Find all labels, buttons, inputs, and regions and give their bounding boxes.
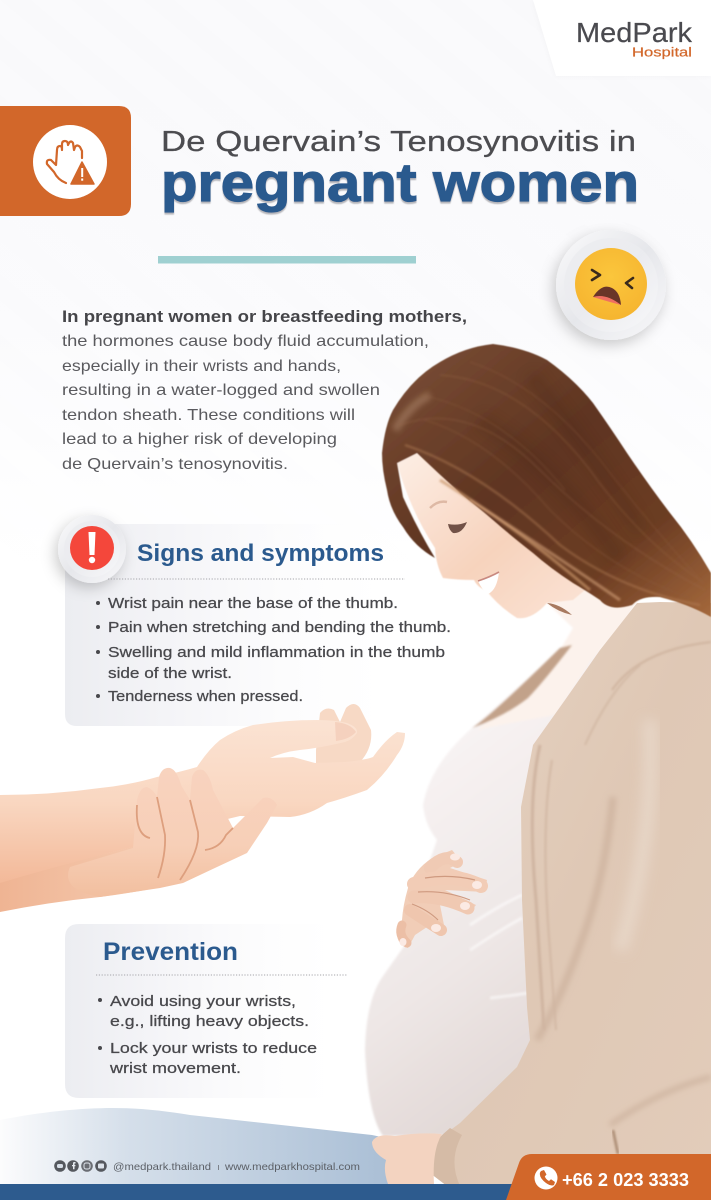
icon: warning triangle — [71, 162, 94, 184]
panel: prevention background — [65, 924, 390, 1098]
cardigan inner collar — [472, 645, 572, 728]
list: prevention: Lock your wrists to reduce — [110, 1040, 317, 1057]
list: symptoms: side of the wrist. — [108, 665, 232, 682]
intro body: tendon sheath. These conditions will — [62, 407, 355, 424]
list: symptoms: Tenderness when pressed. — [108, 688, 303, 705]
footer contact text — [113, 1161, 360, 1173]
finger separators — [137, 797, 233, 880]
upper hand on belly — [397, 850, 487, 948]
photo: hands holding wrist — [0, 704, 405, 912]
list: symptoms: Swelling and mild inflammation in the thumb — [108, 644, 445, 661]
hair — [382, 344, 711, 617]
footer contact text: @medpark.thailand — [113, 1161, 211, 1173]
footer wave — [0, 1108, 420, 1186]
intro body — [62, 333, 429, 473]
heading: signs and symptoms: Signs and symptoms — [137, 540, 384, 567]
list: prevention: e.g., lifting heavy objects. — [110, 1013, 309, 1030]
title line 1: De Quervain’s Tenosynovitis in — [161, 126, 636, 158]
holding hand — [68, 768, 277, 897]
cardigan folds — [532, 642, 711, 1154]
sleeve cuff — [430, 1128, 462, 1186]
lower hand — [372, 1133, 442, 1184]
neck and chest skin — [478, 583, 640, 730]
footer contact text: www.medparkhospital.com — [224, 1161, 360, 1173]
list: prevention: Avoid using your wrists, — [110, 993, 296, 1010]
icon: phone — [534, 1166, 558, 1190]
phone badge — [506, 1154, 711, 1200]
list: symptoms — [96, 595, 451, 705]
list: prevention — [98, 993, 317, 1077]
icon: pained emoji on plate — [556, 230, 666, 340]
icon block: hand with warning — [0, 106, 131, 216]
face — [397, 453, 585, 618]
shirt and belly — [365, 640, 600, 1136]
cardigan — [430, 602, 711, 1200]
intro body: resulting in a water-logged and swollen — [62, 382, 380, 399]
logo — [576, 17, 693, 60]
hair strands — [395, 362, 705, 605]
list: symptoms: Pain when stretching and bending the thumb. — [108, 619, 451, 636]
intro body: the hormones cause body fluid accumulation, — [62, 333, 429, 350]
intro body: de Quervain’s tenosynovitis. — [62, 456, 288, 473]
logo subtitle: Hospital — [632, 46, 692, 60]
phone number: +66 2 023 3333 — [562, 1170, 689, 1190]
facial features — [430, 502, 572, 615]
list: prevention: wrist movement. — [109, 1060, 241, 1077]
far fingers of raised hand — [316, 704, 371, 772]
raised finger nail — [335, 722, 356, 741]
social icons — [54, 1160, 107, 1172]
footer blue bar — [0, 1184, 520, 1200]
finger creases — [412, 876, 475, 920]
panel: signs and symptoms background — [65, 524, 450, 726]
intro lead sentence: In pregnant women or breastfeeding mothers, — [62, 307, 467, 326]
shirt shading folds — [470, 895, 528, 998]
logo backing panel — [533, 0, 711, 76]
raised arm and hand — [0, 720, 405, 883]
lower arm — [0, 845, 200, 912]
photo: pregnant woman — [365, 344, 711, 1200]
title — [161, 126, 639, 213]
intro text — [62, 307, 467, 473]
heading: prevention: Prevention — [103, 938, 238, 966]
fingernails — [400, 854, 482, 946]
intro body: lead to a higher risk of developing — [62, 431, 337, 448]
icon: hand — [47, 141, 82, 183]
intro body: especially in their wrists and hands, — [62, 358, 341, 375]
icon: red alert on plate — [58, 515, 126, 583]
teal divider — [158, 256, 416, 264]
title line 2: pregnant women — [161, 153, 639, 213]
logo wordmark: MedPark — [576, 17, 693, 48]
list: symptoms: Wrist pain near the base of the thumb. — [108, 595, 398, 612]
